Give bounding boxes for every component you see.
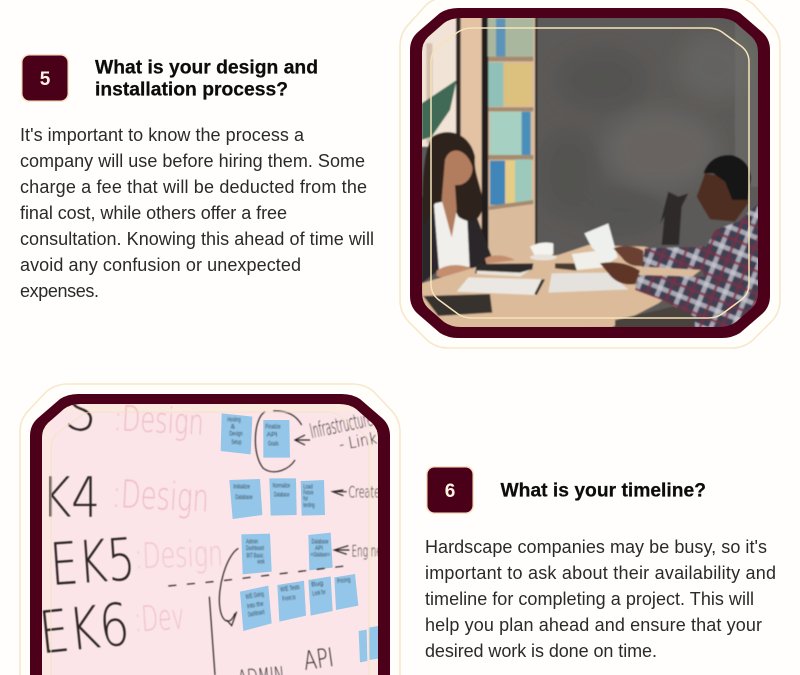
section 6 badge bbox=[426, 466, 474, 514]
section 5 body text: charge a fee that will be deducted from the bbox=[20, 177, 367, 197]
sticky note writing: W/E Going bbox=[245, 591, 265, 601]
sticky note writing: Hosting bbox=[227, 417, 241, 424]
sticky note writing: BIT Basic bbox=[247, 553, 264, 560]
sticky note writing: & bbox=[231, 423, 236, 430]
sticky note writing: Finalize bbox=[265, 423, 281, 430]
number 5: 5 bbox=[40, 69, 51, 90]
section 5 body text: final cost, while others offer a free bbox=[20, 203, 287, 223]
cream inner line bbox=[51, 412, 369, 675]
handwriting: week labels bbox=[42, 404, 378, 675]
woman bbox=[433, 197, 471, 270]
sticky note writing: work bbox=[257, 558, 265, 565]
sticky note writing: Design bbox=[229, 431, 243, 438]
section 5 body text: It's important to know the process a bbox=[20, 125, 305, 145]
section 6 body text: timeline for completing a project. This will bbox=[425, 589, 754, 609]
section 5 body text: company will use before hiring them. Some bbox=[20, 151, 365, 171]
hand-drawn marks: circle, arrows, dashes bbox=[168, 411, 353, 675]
desk bbox=[422, 245, 705, 333]
sticky note writing: for bbox=[303, 495, 308, 502]
sticky note writing: Bug bbox=[311, 580, 324, 589]
photo: whiteboard with sticky notes bbox=[42, 404, 378, 675]
section 5 heading bbox=[95, 56, 318, 100]
maroon frame bbox=[30, 394, 390, 675]
sticky note writing: W/E Tests bbox=[280, 584, 301, 594]
section 5 body text: expenses. bbox=[20, 281, 99, 301]
sticky note writing: Fortune bbox=[303, 489, 313, 496]
section 6 heading: What is your timeline? bbox=[500, 480, 706, 502]
sticky note writing: Initialize bbox=[233, 483, 250, 490]
sticky note writing: testing bbox=[303, 502, 315, 509]
sticky note writing: Look for bbox=[312, 589, 327, 598]
section 5 heading: installation process? bbox=[95, 78, 288, 100]
photo: two people at a desk bbox=[415, 13, 765, 333]
handwriting: week labels: K4 bbox=[42, 466, 100, 530]
sticky note writing: API bbox=[267, 432, 278, 439]
section 5 body text bbox=[20, 125, 374, 301]
handwriting: week labels: EK5 bbox=[48, 525, 137, 599]
sticky note writing: <<Database>> bbox=[311, 552, 330, 559]
section 5 body text: consultation. Knowing this ahead of time will bbox=[20, 229, 374, 249]
sticky notes bbox=[221, 413, 380, 662]
handwriting: week labels: Infrastructure bbox=[308, 407, 375, 443]
outer cream outline bbox=[20, 384, 400, 675]
section 6 body text bbox=[425, 537, 776, 661]
sticky note writing: Database bbox=[312, 538, 329, 545]
section 5 badge bbox=[21, 54, 69, 102]
cream inner line bbox=[431, 28, 749, 318]
maroon frame bbox=[410, 8, 770, 338]
sticky note writing: Load bbox=[303, 483, 313, 490]
handwriting: week labels: Create bbox=[348, 483, 380, 502]
sticky note writing: Front to bbox=[282, 594, 296, 603]
handwriting: week labels: :Design bbox=[111, 472, 210, 522]
sticky note writing: Dashboard bbox=[247, 609, 265, 619]
section 6 body text: Hardscape companies may be busy, so it's bbox=[425, 537, 767, 557]
section 5 body text: avoid any confusion or unexpected bbox=[20, 255, 301, 275]
sticky note writing: Dashboard bbox=[246, 545, 264, 552]
section 6 body text: important to ask about their availability and bbox=[425, 563, 776, 583]
outer cream outline bbox=[400, 0, 780, 348]
handwriting: week labels: S bbox=[62, 377, 100, 446]
handwriting: week labels: :Design bbox=[134, 534, 224, 577]
handwriting: week labels: - Link bbox=[337, 429, 378, 454]
section 5 heading: What is your design and bbox=[95, 56, 318, 78]
man bbox=[635, 203, 762, 330]
sticky note writing: Admin bbox=[246, 538, 258, 545]
handwriting: week labels: Eng ne bbox=[352, 542, 382, 561]
sticky note writing bbox=[227, 417, 351, 619]
section 6 body text: desired work is done on time. bbox=[425, 641, 657, 661]
handwriting: week labels: EK6 bbox=[36, 590, 133, 667]
sticky note writing: Into the bbox=[246, 600, 264, 610]
panel: whiteboard photo frame bbox=[20, 377, 400, 675]
number 6: 6 bbox=[445, 481, 455, 502]
sticky note writing: Pricing bbox=[337, 576, 351, 585]
handwriting: week labels: :Design bbox=[113, 399, 205, 444]
section 6 body text: help you plan ahead and ensure that your bbox=[425, 615, 762, 635]
sticky note writing: Normalize bbox=[273, 483, 290, 490]
sticky note writing: Database bbox=[235, 494, 253, 501]
panel: meeting photo frame bbox=[400, 0, 780, 348]
handwriting: week labels: :Dev bbox=[133, 597, 186, 641]
sticky note writing: Goals bbox=[268, 441, 279, 448]
sticky note writing: Setup bbox=[231, 439, 241, 446]
sticky note writing: Database bbox=[274, 492, 289, 499]
sticky note writing: API bbox=[315, 545, 323, 552]
